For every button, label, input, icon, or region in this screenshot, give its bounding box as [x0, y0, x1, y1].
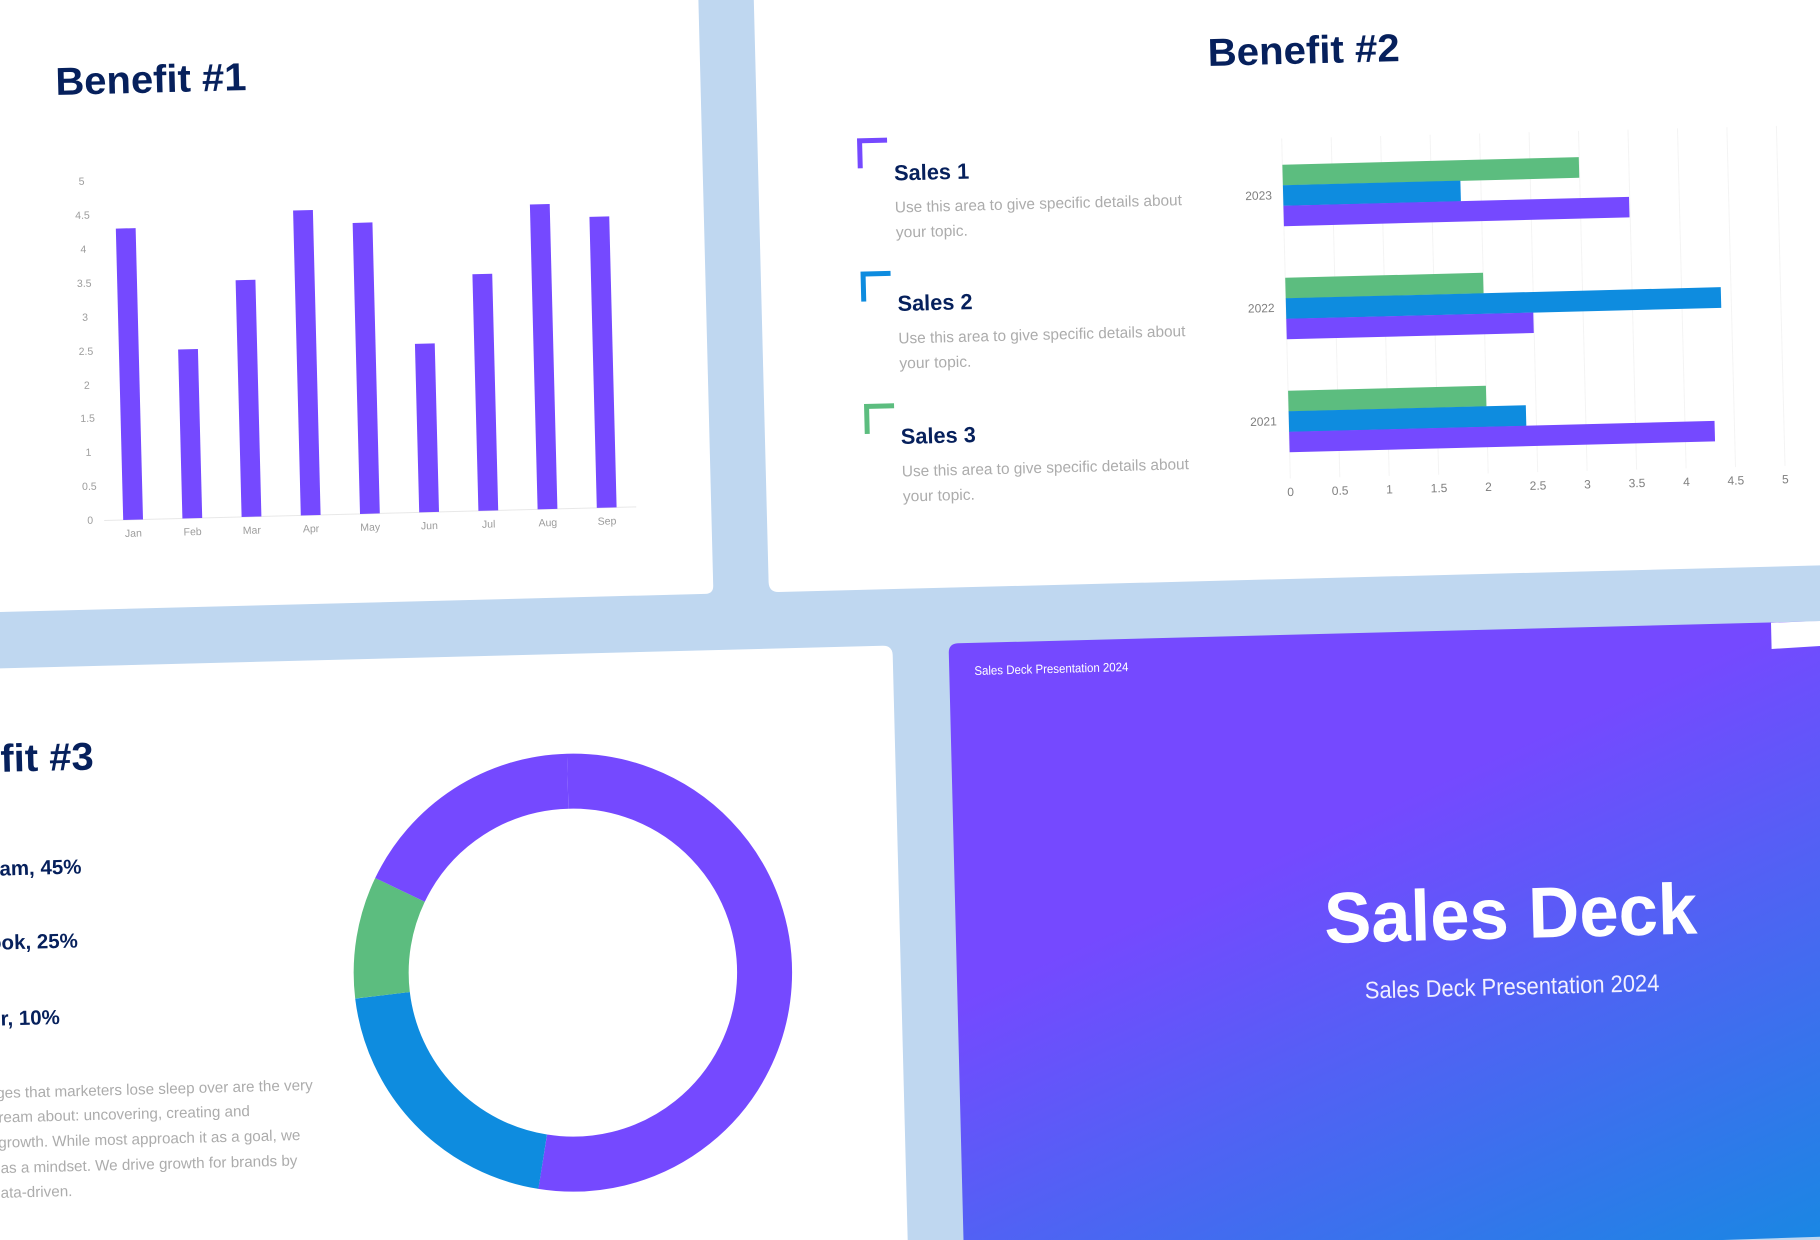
month labels: Apr [303, 523, 320, 535]
icon: blue bracket [860, 271, 891, 302]
year labels: 2023 [1245, 188, 1272, 203]
Sales 2 description: your topic. [899, 354, 972, 372]
bars [115, 202, 617, 520]
y axis labels: 4 [80, 244, 87, 256]
month labels: Jan [125, 528, 142, 540]
Sales 3 description: your topic. [903, 487, 975, 505]
item: Sales 3 [864, 403, 1190, 505]
month labels: Jun [421, 520, 438, 532]
y axis labels: 1 [85, 447, 92, 459]
x axis labels: 4.5 [1727, 473, 1745, 488]
x axis labels: 3.5 [1628, 476, 1646, 490]
panel: Sales Deck cover [949, 621, 1820, 1240]
2022 bars [1285, 267, 1722, 339]
panel 4 gradient card [949, 621, 1820, 1240]
y axis labels: 0.5 [82, 481, 97, 493]
year labels: 2022 [1248, 301, 1275, 316]
Sales 1 description [895, 192, 1183, 241]
x axis labels: 1 [1386, 482, 1393, 497]
x axis labels: 3 [1584, 477, 1591, 491]
icon: green bracket [864, 403, 895, 434]
panel 3 card [0, 646, 908, 1240]
month labels: Mar [243, 524, 262, 537]
panel 1 card [0, 0, 713, 612]
Sales 1 description: Use this area to give specific details about [895, 192, 1183, 216]
month labels: Aug [538, 517, 558, 529]
bar chart: monthly values [74, 162, 637, 541]
heading: Benefit #1: Benefit #1 [55, 56, 247, 104]
panel: Benefit #3 [0, 646, 908, 1240]
icon: purple bracket [857, 138, 888, 168]
panel: Benefit #1 [0, 0, 713, 612]
x axis labels: 4 [1683, 475, 1690, 489]
2021 bars [1288, 380, 1715, 452]
y axis labels: 3.5 [77, 278, 92, 290]
Sales 2 heading: Sales 2 [897, 289, 973, 316]
panel 2 card [754, 0, 1820, 592]
y axis labels: 0 [87, 515, 93, 527]
y axis labels: 3 [82, 312, 88, 324]
donut: blue segment [382, 995, 543, 1162]
cover subtitle: Sales Deck Presentation 2024 [1364, 970, 1660, 1004]
item: Sales 1 [857, 138, 1183, 241]
y axis labels: 1.5 [80, 413, 95, 425]
Sales 3 description [902, 456, 1190, 505]
Sales 1 description: your topic. [896, 223, 968, 241]
x axis labels: 1.5 [1431, 481, 1448, 495]
month labels: May [360, 521, 381, 534]
donut: green segment [381, 890, 400, 995]
x axis labels: 2.5 [1530, 478, 1547, 493]
Sales 3 description: Use this area to give specific details about [902, 456, 1190, 480]
donut: purple main segment [543, 781, 765, 1164]
x axis labels: 0.5 [1332, 484, 1349, 498]
month labels: Feb [183, 526, 202, 538]
x axis labels: 5 [1782, 472, 1789, 486]
panel: Benefit #2 [754, 0, 1820, 592]
Sales 3 heading: Sales 3 [900, 422, 976, 449]
year labels: 2021 [1250, 414, 1277, 429]
donut chart [381, 781, 765, 1164]
y axis labels [74, 176, 98, 527]
list of percentages [0, 856, 82, 1032]
month labels [125, 515, 617, 540]
y axis labels: 4.5 [75, 210, 90, 222]
Sales 2 description: Use this area to give specific details about [898, 323, 1186, 347]
x axis labels: 2 [1485, 480, 1492, 494]
Sales 1 heading: Sales 1 [894, 159, 969, 185]
small header text: Sales Deck Presentation 2024 [974, 660, 1129, 678]
year labels [1244, 188, 1278, 429]
y axis labels: 5 [79, 176, 85, 188]
Sales 2 description [898, 323, 1186, 372]
x axis labels [1287, 472, 1789, 499]
donut: purple small segment [400, 781, 568, 890]
body paragraph [0, 1077, 313, 1203]
bar chart: horizontal yearly bars [1243, 126, 1789, 500]
x axis labels: 0 [1287, 485, 1294, 499]
corner tab [1771, 621, 1820, 649]
month labels: Sep [598, 515, 617, 528]
y axis labels: 2.5 [78, 346, 94, 358]
heading: Benefit #2: Benefit #2 [1207, 27, 1400, 75]
item: Sales 2 [860, 271, 1186, 372]
y axis labels: 2 [84, 380, 90, 392]
month labels: Jul [482, 518, 496, 531]
cover title: Sales Deck [1323, 869, 1699, 959]
2023 bars [1282, 156, 1630, 226]
